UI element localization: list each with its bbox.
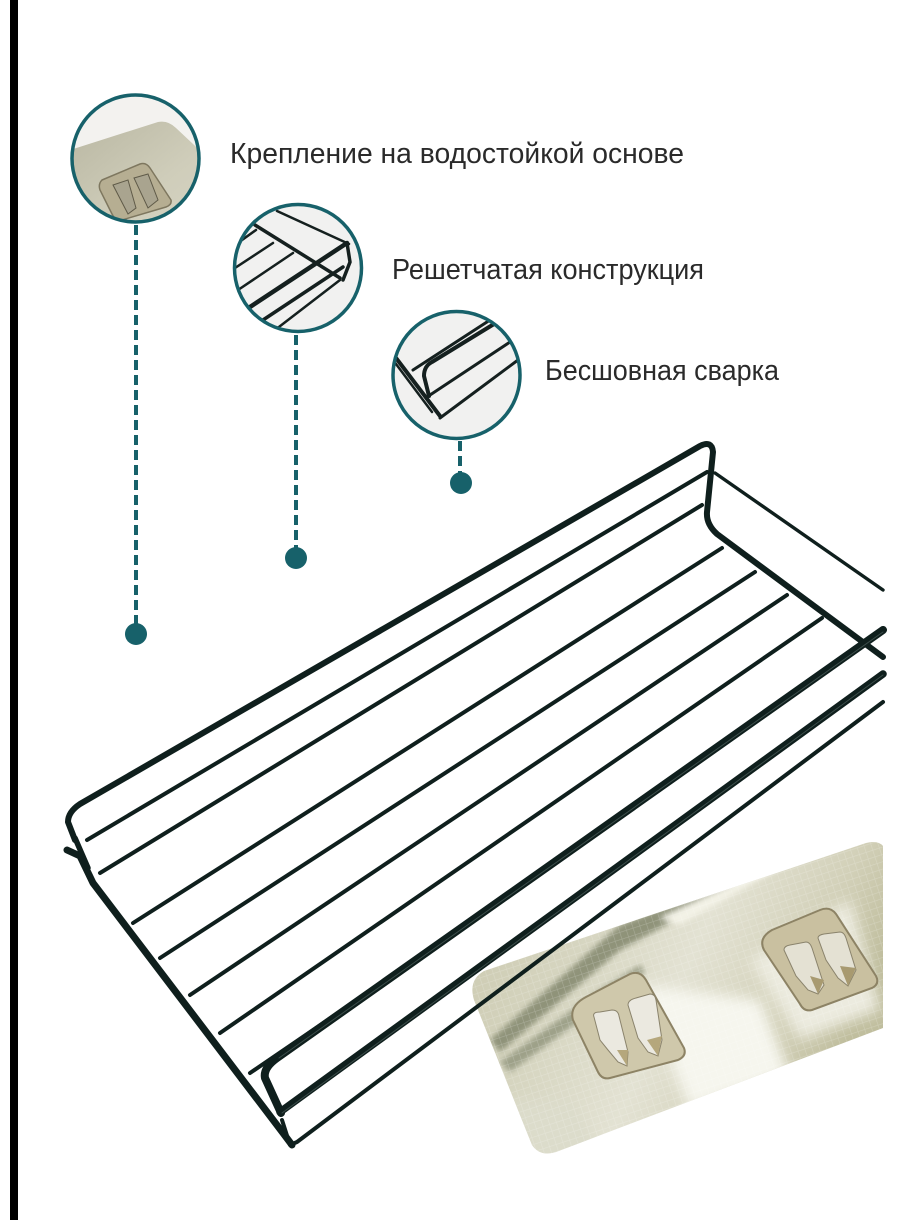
circle photo 2 — [230, 200, 366, 336]
leader line 1 — [125, 225, 147, 645]
suction pad left — [572, 973, 685, 1078]
callout 1: mount — [70, 90, 684, 645]
top back rail with corners — [68, 444, 883, 840]
label 2: Решетчатая конструкция — [392, 254, 704, 286]
front rails — [265, 630, 883, 1113]
product photo: adhesive plate — [460, 830, 890, 1160]
black vertical bar — [10, 0, 18, 1220]
callout 2: grid construction — [230, 200, 704, 569]
cross wires — [87, 472, 822, 1073]
leader line 3 — [450, 441, 472, 494]
callout 3: seamless welding — [388, 308, 780, 494]
far frame rail — [715, 473, 883, 590]
suction pad right — [762, 909, 877, 1010]
circle photo 3 — [388, 308, 524, 444]
label 1: Крепление на водостойкой основе — [230, 138, 684, 170]
leader line 2 — [285, 335, 307, 569]
side rail — [67, 850, 292, 1145]
circle photo 1 — [70, 93, 201, 224]
product photo: wire shelf rack — [67, 444, 883, 1145]
label 3: Бесшовная сварка — [545, 355, 780, 387]
